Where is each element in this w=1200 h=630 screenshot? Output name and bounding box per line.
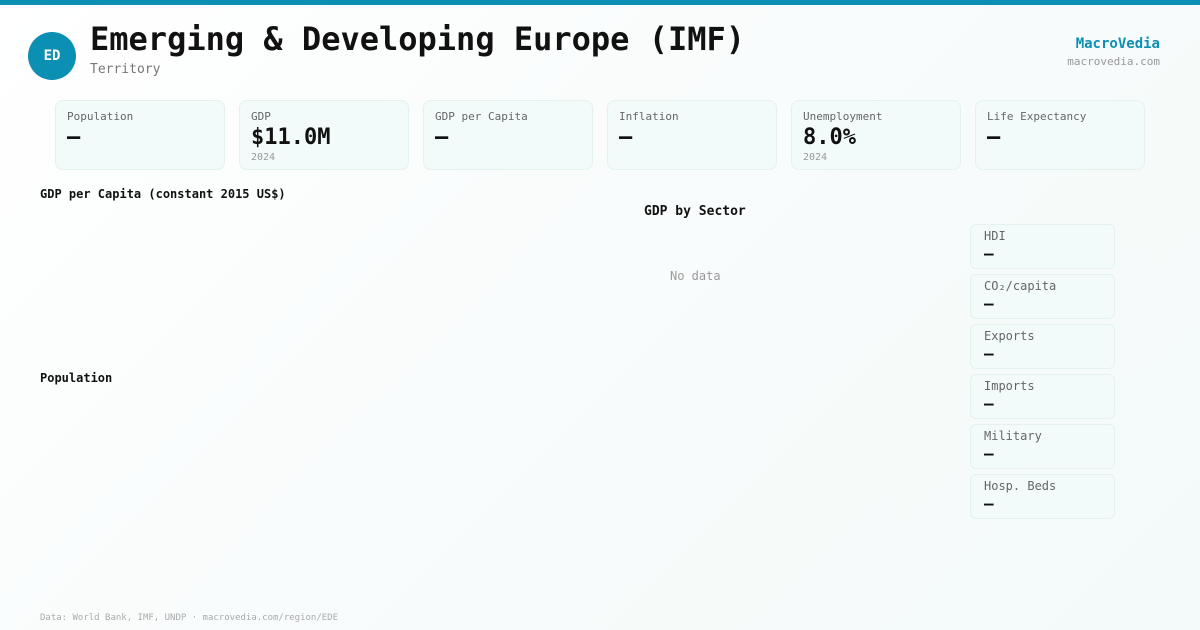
- badge: ED: [44, 48, 60, 64]
- indicator: imports: —: [984, 394, 994, 413]
- indicator: HDI: —: [984, 244, 994, 263]
- card: gdp per capita: GDP per Capita: [435, 110, 528, 123]
- card: population: Population: [67, 110, 133, 123]
- card: unemployment: 2024: [803, 152, 827, 163]
- card: gdp: $11.0M: [251, 125, 330, 150]
- stat cards: [55, 100, 1145, 170]
- indicator: CO2: CO₂/capita: [984, 279, 1056, 293]
- indicator: HDI: HDI: [984, 229, 1006, 243]
- brand: [1067, 36, 1160, 68]
- side indicators: [970, 224, 1115, 519]
- indicator: CO2: [970, 274, 1115, 319]
- card: unemployment: [791, 100, 961, 170]
- card: gdp per capita: —: [435, 125, 448, 150]
- heading: gdp per capita chart: GDP per Capita (constant 2015 US$): [40, 187, 286, 201]
- indicator: imports: Imports: [984, 379, 1035, 393]
- subtitle: Territory: [90, 62, 160, 77]
- card: life expectancy: —: [987, 125, 1000, 150]
- brand: MacroVedia: [1076, 36, 1160, 52]
- card: inflation: Inflation: [619, 110, 679, 123]
- card: population: [55, 100, 225, 170]
- indicator: military: Military: [984, 429, 1042, 443]
- badge: [28, 32, 76, 80]
- card: inflation: [607, 100, 777, 170]
- indicator: hospital beds: Hosp. Beds: [984, 479, 1056, 493]
- indicator: hospital beds: [970, 474, 1115, 519]
- card: gdp: GDP: [251, 110, 271, 123]
- indicator: military: [970, 424, 1115, 469]
- card: population: —: [67, 125, 80, 150]
- card: unemployment: 8.0%: [803, 125, 856, 150]
- no data text: No data: [670, 269, 721, 283]
- card: inflation: —: [619, 125, 632, 150]
- indicator: exports: Exports: [984, 329, 1035, 343]
- brand: macrovedia.com: [1067, 55, 1160, 68]
- indicator: military: —: [984, 444, 994, 463]
- card: unemployment: Unemployment: [803, 110, 882, 123]
- card: gdp: 2024: [251, 152, 275, 163]
- footer: Data: World Bank, IMF, UNDP · macrovedia.com/region/EDE: [40, 613, 338, 623]
- card: gdp: [239, 100, 409, 170]
- indicator: imports: [970, 374, 1115, 419]
- indicator: exports: —: [984, 344, 994, 363]
- top bar: [0, 0, 1200, 5]
- indicator: exports: [970, 324, 1115, 369]
- indicator: CO2: —: [984, 294, 994, 313]
- heading: gdp by sector: GDP by Sector: [644, 204, 746, 219]
- card: gdp per capita: [423, 100, 593, 170]
- heading: population: Population: [40, 371, 112, 385]
- indicator: hospital beds: —: [984, 494, 994, 513]
- indicator: HDI: [970, 224, 1115, 269]
- card: life expectancy: [975, 100, 1145, 170]
- title: Emerging & Developing Europe (IMF): [90, 20, 745, 58]
- card: life expectancy: Life Expectancy: [987, 110, 1086, 123]
